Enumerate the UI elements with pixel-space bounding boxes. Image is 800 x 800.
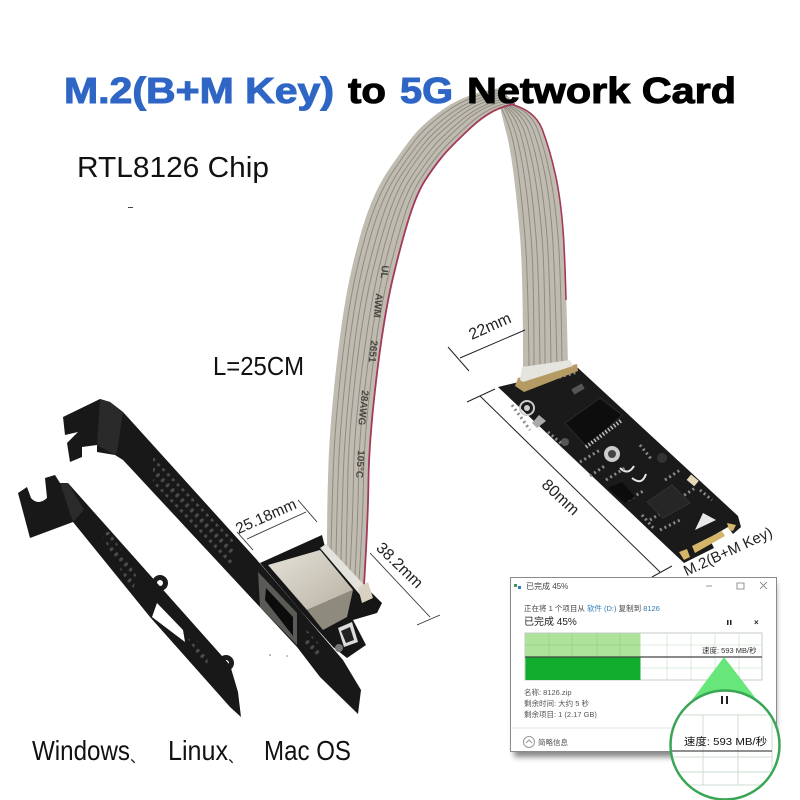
metal shield [268, 550, 353, 610]
bracket plate [63, 399, 361, 714]
dialog shadow [514, 583, 776, 757]
file details: 名称: 8126.zip [524, 687, 572, 697]
operating systems label [32, 735, 351, 766]
dimension 38.2mm: 38.2mm [372, 540, 426, 592]
ribbon cable [327, 88, 568, 585]
dimension 22mm [448, 310, 525, 371]
source line: 正在将 1 个项目从 软件 (D:) 复制到 8126 [524, 603, 660, 613]
title: Network Card [467, 70, 736, 111]
card pcb [260, 535, 382, 658]
pause and cancel [727, 618, 759, 627]
ribbon print: AWM [370, 293, 384, 318]
copy progress dialog [510, 578, 776, 757]
dimension 22mm: 22mm [466, 310, 514, 344]
operating systems label: 、 [228, 749, 243, 766]
marking [338, 622, 358, 647]
window opening [152, 603, 185, 642]
ribbon print [353, 265, 390, 478]
title [64, 70, 736, 111]
chip label: RTL8126 Chip [77, 152, 269, 184]
ribbon print: 105°C [353, 450, 366, 478]
operating systems label: Linux [168, 735, 228, 766]
fewer details: 简略信息 [538, 737, 568, 747]
speed chart [525, 633, 762, 680]
ribbon: right band [500, 104, 568, 367]
lens [670, 690, 780, 800]
dimension 25.18mm: 25.18mm [233, 496, 299, 538]
stray specks [269, 654, 271, 656]
stray mark [128, 207, 133, 208]
title: to [348, 70, 386, 111]
transformer chip [565, 398, 622, 447]
RJ45 port [258, 572, 297, 645]
window title: 已完成 45% [526, 581, 568, 591]
beam [692, 657, 757, 700]
title: M.2(B+M Key) [64, 70, 334, 111]
file details: 剩余项目: 1 (2.17 GB) [524, 709, 597, 719]
ribbon: left band [327, 88, 515, 585]
ribbon print: UL [378, 265, 390, 279]
dimension 80mm: 80mm [538, 476, 582, 519]
fewer details [524, 736, 568, 748]
ribbon print: 28AWG [355, 390, 370, 426]
magnifier [670, 657, 780, 800]
speed chart: 速度: 593 MB/秒 [702, 645, 757, 655]
zoomed speed: 速度: 593 MB/秒 [684, 735, 768, 748]
dimension 25.18mm [233, 496, 317, 550]
dimension 80mm [467, 389, 672, 577]
vent holes [100, 532, 136, 593]
card pcb [498, 368, 741, 563]
percent: 已完成 45% [524, 615, 577, 628]
ribbon print: 2651 [366, 340, 379, 363]
M.2 key label: M.2(B+M Key) [681, 524, 775, 580]
pause icon [721, 696, 728, 704]
ribbon socket [515, 364, 578, 392]
plate [18, 475, 241, 717]
socket [320, 544, 366, 596]
mounting ears [152, 575, 168, 591]
operating systems label: Mac OS [264, 735, 351, 766]
network controller chip [647, 485, 690, 518]
window title [514, 581, 767, 591]
board markings [520, 383, 716, 530]
full-height bracket with network card [63, 399, 382, 714]
file details: 剩余时间: 大约 5 秒 [524, 698, 590, 708]
gold fingers [679, 523, 736, 560]
title: 5G [400, 70, 453, 111]
file details [524, 687, 597, 719]
small chip [608, 482, 635, 503]
operating systems label: Windows [32, 735, 130, 766]
pause and cancel: × [754, 618, 759, 627]
cable length label: L=25CM [213, 351, 304, 381]
low-profile bracket [18, 475, 241, 717]
dimension 38.2mm [370, 540, 440, 625]
dialog window [510, 578, 776, 752]
vent holes [153, 457, 233, 567]
M.2 card [498, 360, 741, 563]
operating systems label: 、 [130, 749, 145, 766]
